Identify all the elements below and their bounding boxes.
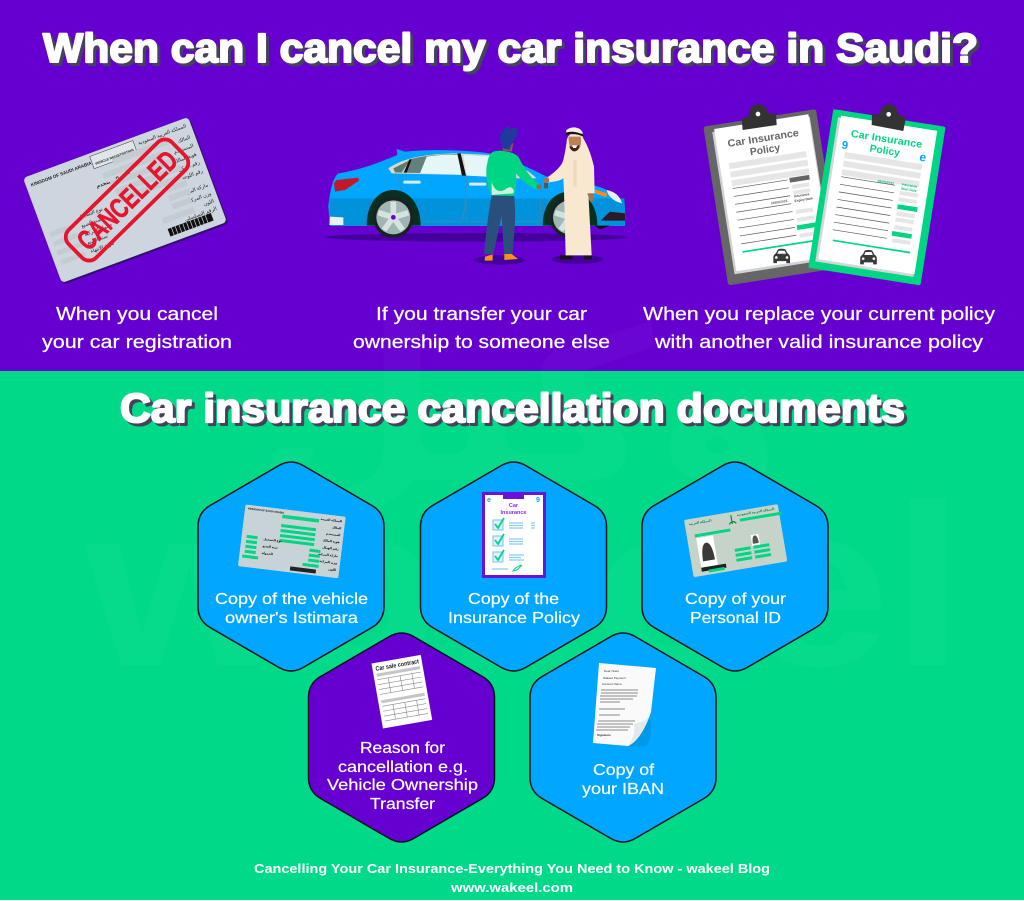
figure: man in green sweater bbox=[473, 126, 541, 265]
illustration: cancelled registration card: CANCELLED bbox=[71, 144, 184, 256]
hexagon: personal ID bbox=[642, 462, 828, 671]
illustration: cancelled registration card: حمولة المركبة bbox=[84, 222, 113, 238]
icon: policy document bbox=[482, 492, 546, 578]
icon: ID card: المملكة العربية السعودية bbox=[737, 507, 775, 517]
caption: cancel registration bbox=[42, 303, 232, 352]
footer source bbox=[254, 861, 770, 895]
figure: man in white thobe bbox=[543, 127, 603, 264]
infographic: wakeel bbox=[84, 457, 965, 714]
label bbox=[448, 591, 580, 627]
label: Insurance Policy bbox=[448, 610, 580, 627]
caption: replace policy: When you replace your current policy bbox=[643, 303, 996, 324]
clipboard: current policy: Expiry Date bbox=[794, 196, 813, 203]
illustration: car ownership transfer bbox=[325, 126, 628, 265]
label: Personal ID bbox=[690, 610, 781, 627]
illustration: cancelled registration card: VEHICLE REGISTRATION bbox=[94, 148, 135, 166]
clipboard: current policy bbox=[703, 109, 841, 285]
icon: policy document: Car bbox=[509, 503, 519, 509]
icon: curled letter: Account Name bbox=[602, 682, 622, 686]
illustration: cancelled registration card: وزن المركبة bbox=[187, 191, 213, 205]
icon: car bbox=[773, 249, 790, 263]
clipboard: new policy: 9 bbox=[841, 140, 849, 152]
clipboard: current policy: Policy bbox=[749, 143, 781, 158]
heading: documents: Car insurance cancellation documents bbox=[123, 388, 908, 434]
illustration: cancelled registration card: الرقم التسلسلي bbox=[184, 206, 218, 223]
icon: car bbox=[860, 250, 877, 264]
hexagon: IBAN bbox=[530, 633, 716, 842]
caption: replace policy bbox=[643, 303, 996, 352]
label: Copy of bbox=[593, 762, 655, 779]
footer source: www.wakeel.com bbox=[450, 880, 573, 895]
title: When can I cancel my car insurance in Saudi? bbox=[43, 25, 978, 71]
icon: policy document: e bbox=[487, 497, 491, 504]
icon: curled letter: Wakeel Payment bbox=[603, 676, 626, 680]
icon: registration card: ماركة المركبة bbox=[318, 552, 338, 558]
caption: cancel registration: your car registration bbox=[42, 331, 232, 352]
illustration: cancelled registration card: سنة الصنع bbox=[87, 233, 109, 246]
icon: registration card: سنة الصنع bbox=[262, 544, 278, 550]
hexagon: vehicle owner's Istimara bbox=[198, 462, 384, 671]
icon: registration card: المالك bbox=[332, 525, 342, 530]
illustration: cancelled registration card: المالك bbox=[177, 135, 191, 145]
clipboard: current policy: Insurance bbox=[794, 192, 810, 198]
icon: car sale contract bbox=[372, 655, 432, 728]
illustration: cancelled registration card: رقم الهيكل bbox=[177, 160, 201, 173]
label: Vehicle Ownership bbox=[327, 777, 478, 794]
caption: replace policy: with another valid insurance policy bbox=[654, 331, 984, 352]
icon: registration card: المملكة العربية bbox=[320, 517, 342, 523]
clipboard: new policy: 28/05/2022 bbox=[877, 179, 895, 186]
clipboard: new policy bbox=[808, 109, 946, 285]
illustration: cancelled registration card: نوع التسجيل bbox=[77, 207, 104, 221]
label bbox=[582, 762, 664, 798]
clip: left bbox=[742, 104, 777, 130]
illustration: cancelled registration card: المستخدم bbox=[173, 143, 194, 156]
caption: transfer ownership: ownership to someone else bbox=[353, 331, 610, 352]
icon: registration card: KINGDOM OF SAUDI ARABIA bbox=[248, 506, 285, 515]
illustration: cancelled registration card: هوية المالك bbox=[173, 151, 198, 165]
footer source: Cancelling Your Car Insurance-Everything You Need to Know - wakeel Blog bbox=[254, 861, 770, 876]
icon: registration card bbox=[238, 504, 346, 578]
label: Copy of your bbox=[685, 591, 787, 608]
illustration: cancelled registration card: سنة الصنع bbox=[80, 217, 102, 230]
clipboard: new policy: e bbox=[918, 150, 928, 165]
label: Transfer bbox=[370, 796, 436, 813]
icon: registration card: نوع التسجيل bbox=[263, 537, 282, 543]
caption: transfer ownership bbox=[353, 303, 610, 352]
icon: car sale contract: Car sale contract bbox=[375, 658, 420, 673]
icon: registration card: رقم الهيكل bbox=[322, 545, 339, 551]
icon: curled letter: Signature bbox=[597, 733, 611, 737]
caption: cancel registration: When you cancel bbox=[56, 303, 218, 324]
icon: ID card bbox=[684, 504, 789, 577]
clipboard: current policy: Car Insurance bbox=[727, 128, 800, 150]
icon: registration card: الحمولة bbox=[261, 551, 273, 556]
illustration: cancelled registration card: هوية المستخدم bbox=[96, 171, 133, 190]
clip: right bbox=[872, 104, 906, 131]
label bbox=[215, 591, 368, 627]
icon: registration card: المستخدم bbox=[326, 532, 341, 537]
label: Copy of the bbox=[468, 591, 559, 608]
label: Copy of the vehicle bbox=[215, 591, 368, 608]
icon: policy document: Insurance bbox=[501, 510, 526, 516]
icon: curled letter bbox=[593, 663, 656, 747]
illustration: cancelled registration card: KINGDOM OF SAUDI ARABIA bbox=[30, 160, 93, 188]
icon: ID card: المملكة العربية bbox=[688, 518, 712, 526]
label: cancellation e.g. bbox=[338, 759, 468, 776]
infographic: وكيل bbox=[257, 285, 783, 532]
label bbox=[327, 740, 478, 813]
label bbox=[685, 591, 787, 627]
clipboard: new policy: Car Insurance bbox=[850, 129, 923, 151]
illustration: insurance policy clipboards bbox=[703, 104, 946, 285]
label: owner's Istimara bbox=[225, 610, 358, 627]
clipboard: new policy: Start Date bbox=[901, 187, 917, 193]
caption: transfer ownership: If you transfer your car bbox=[376, 303, 587, 324]
label: Reason for bbox=[360, 740, 446, 757]
illustration: cancelled registration card: تاريخ الانتهاء bbox=[90, 240, 116, 255]
illustration: cancelled registration card: رقم اللوحة bbox=[181, 168, 204, 182]
icon: registration card: وزن المركبة bbox=[319, 559, 337, 565]
illustration: cancelled registration card: اللون bbox=[203, 198, 215, 208]
illustration: cancelled registration card: ماركة المركبة bbox=[181, 182, 209, 198]
icon: registration card: اللون bbox=[328, 567, 336, 572]
label: your IBAN bbox=[582, 781, 664, 798]
illustration: cancelled registration card: المملكة العربية السعودية bbox=[137, 123, 187, 147]
icon: curled letter: Dear Client bbox=[604, 669, 619, 673]
hexagon: reason for cancellation bbox=[308, 633, 494, 842]
icon: policy document: 9 bbox=[536, 497, 540, 504]
title: When can I cancel my car insurance in Saudi? bbox=[46, 28, 981, 74]
clipboard: current policy: 28/05/2022 bbox=[771, 199, 788, 205]
heading: documents: Car insurance cancellation documents bbox=[120, 385, 905, 431]
icon: registration card: هوية المالك bbox=[323, 538, 340, 544]
clipboard: new policy: Insurance bbox=[901, 182, 918, 189]
clipboard: new policy: Policy bbox=[869, 144, 901, 159]
hexagon: insurance policy bbox=[420, 462, 606, 671]
illustration: cancelled registration card bbox=[23, 117, 229, 285]
